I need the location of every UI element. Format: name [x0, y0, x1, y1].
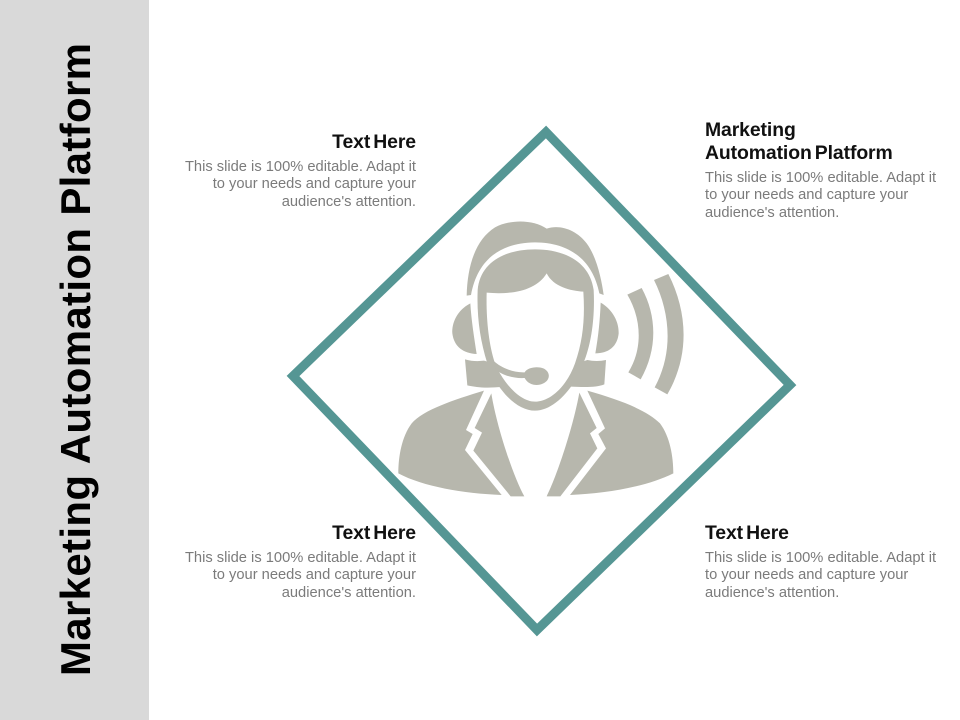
- heading: bottom right: Text Here: [705, 522, 789, 544]
- body: bottom right: This slide is 100% editable. Adapt it: [705, 550, 936, 566]
- icon part: left lapel: [473, 393, 524, 496]
- text block: bottom left: [185, 522, 416, 601]
- icon part: right lapel: [547, 393, 597, 496]
- heading: top right: [705, 119, 893, 164]
- icon part: left ear cup: [452, 303, 477, 354]
- heading: top left: Text Here: [332, 131, 416, 153]
- sidebar panel: [0, 0, 149, 720]
- icon part: right shoulder: [570, 391, 673, 495]
- body: bottom right: to your needs and capture your: [705, 567, 908, 583]
- body: bottom right: [705, 550, 936, 601]
- body: top right: [705, 170, 936, 221]
- text block: top left: [185, 131, 416, 210]
- body: top left: [185, 159, 416, 210]
- heading: top right: Automation Platform: [705, 142, 893, 164]
- icon part: left neck hair: [465, 359, 503, 388]
- body: top left: This slide is 100% editable. Adapt it: [185, 159, 416, 175]
- icon: support agent with headset: [398, 222, 684, 496]
- body: top left: to your needs and capture your: [213, 176, 416, 192]
- icon part: outer sound wave: [654, 274, 684, 394]
- text block: top right: [705, 119, 936, 221]
- body: top right: to your needs and capture your: [705, 187, 908, 203]
- body: top left: audience's attention.: [282, 194, 416, 210]
- heading: top right: Marketing: [705, 119, 796, 141]
- diamond frame: [286, 126, 796, 636]
- icon part: inner sound wave: [627, 288, 653, 379]
- icon part: right neck hair: [571, 360, 606, 387]
- icon part: head and fringe: [477, 249, 594, 411]
- body: bottom left: [185, 550, 416, 601]
- body: top right: This slide is 100% editable. Adapt it: [705, 170, 936, 186]
- body: bottom left: audience's attention.: [282, 585, 416, 601]
- body: bottom left: This slide is 100% editable. Adapt it: [185, 550, 416, 566]
- icon part: left shoulder: [398, 391, 502, 495]
- title: Marketing Automation Platform: [52, 43, 99, 676]
- icon part: hair: [467, 221, 604, 296]
- body: bottom right: audience's attention.: [705, 585, 839, 601]
- body: top right: audience's attention.: [705, 205, 839, 221]
- body: bottom left: to your needs and capture your: [213, 567, 416, 583]
- icon part: microphone: [493, 361, 549, 385]
- heading: bottom left: Text Here: [332, 522, 416, 544]
- text block: bottom right: [705, 522, 936, 601]
- icon part: right ear cup: [595, 303, 619, 353]
